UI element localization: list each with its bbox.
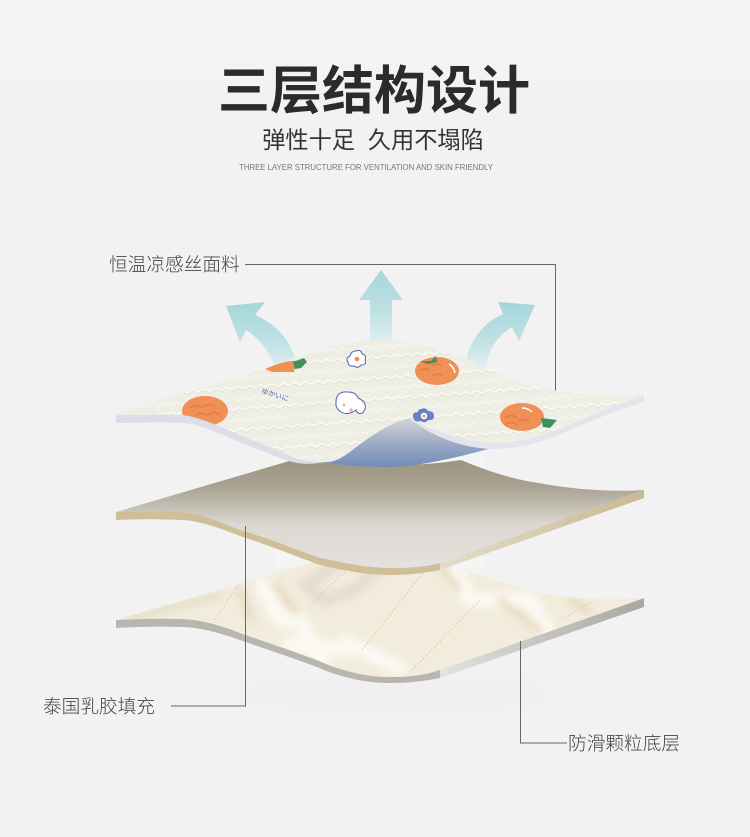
layer 1 side edge xyxy=(116,415,328,464)
leader line: latex xyxy=(171,526,246,706)
label: anti-slip: 防滑颗粒底层 xyxy=(568,733,680,754)
layer 2 surface xyxy=(116,459,644,568)
puppy print xyxy=(336,392,365,414)
faint packaging backdrop xyxy=(275,450,485,568)
pumpkin print xyxy=(182,356,557,431)
soft shadow under bottom layer xyxy=(225,684,565,704)
layered mattress diagram xyxy=(116,264,644,744)
layer 3: anti-slip bottom xyxy=(110,555,650,685)
leader line: top fabric xyxy=(245,264,556,396)
layer 3 side edge right xyxy=(440,598,644,678)
layer 1 quilted surface xyxy=(116,340,643,462)
label: latex: 泰国乳胶填充 xyxy=(43,696,155,717)
layer 1 blue underside xyxy=(318,418,556,467)
flower print xyxy=(347,350,434,422)
title: 三层结构设计 xyxy=(218,63,530,121)
layer 3 plush surface xyxy=(118,562,644,677)
layer 3 side edge xyxy=(116,619,440,683)
layer 2 side edge right xyxy=(440,490,644,570)
arrow: left xyxy=(226,302,297,372)
layer 1: cooling fabric xyxy=(110,335,650,470)
arrow: right xyxy=(466,302,535,368)
layer 2 side edge xyxy=(116,511,440,575)
arrows: ventilation xyxy=(226,270,535,372)
english caption: THREE LAYER STRUCTURE FOR VENTILATION AND SKIN FRIENDLY xyxy=(239,163,493,172)
handwriting print: ゆかいに xyxy=(260,387,290,403)
label: fabric: 恒温凉感丝面料 xyxy=(109,254,240,275)
layer 1 side edge right xyxy=(409,395,644,449)
layer 2: latex filling xyxy=(116,459,644,575)
subtitle: 弹性十足 久用不塌陷 xyxy=(262,127,484,153)
arrow: up xyxy=(359,270,403,344)
leader line: bottom xyxy=(520,641,567,743)
